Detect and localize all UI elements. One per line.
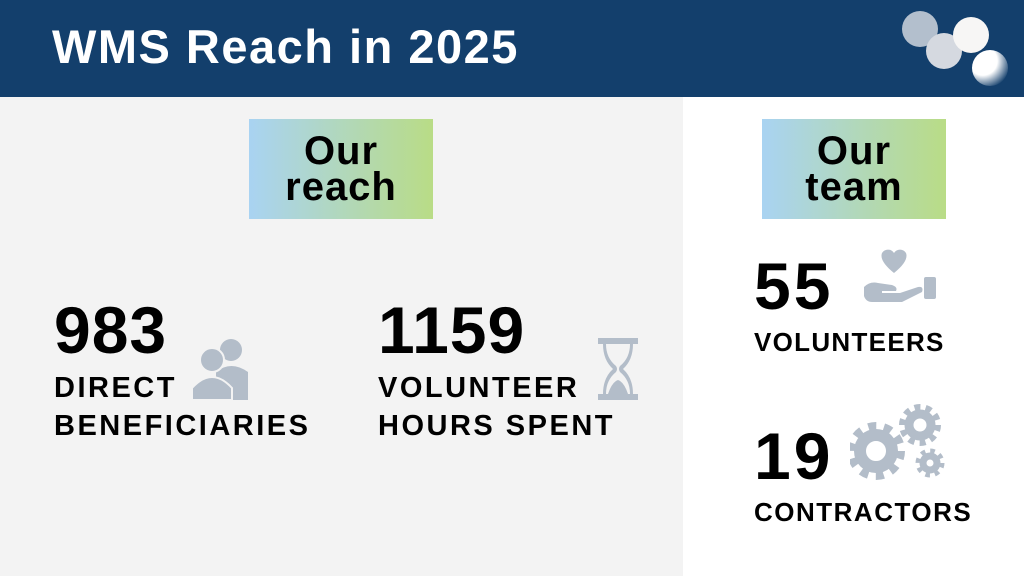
title: WMS Reach in 2025 bbox=[52, 20, 519, 73]
stat: 55 volunteers bbox=[754, 249, 945, 357]
panel: our reach: Our bbox=[304, 129, 378, 173]
stat: 19 contractors bbox=[754, 419, 972, 527]
header bar bbox=[0, 0, 1024, 97]
icon: people bbox=[193, 339, 248, 400]
text: HOURS SPENT bbox=[378, 410, 615, 442]
text: BENEFICIARIES bbox=[54, 410, 310, 442]
panel: our reach bbox=[249, 119, 433, 219]
icon: hourglass bbox=[598, 338, 638, 400]
text: 983 bbox=[54, 293, 167, 367]
text: 1159 bbox=[378, 293, 525, 367]
icon: gears bbox=[850, 404, 944, 480]
icon: heart hand bbox=[864, 250, 936, 302]
left panel background bbox=[0, 97, 683, 576]
text: VOLUNTEER bbox=[378, 372, 579, 404]
panel: our team: team bbox=[805, 165, 903, 209]
text: 55 bbox=[754, 249, 833, 323]
stat: 983 bbox=[54, 293, 310, 442]
panel: our team: Our bbox=[817, 129, 891, 173]
panel: our team bbox=[762, 119, 946, 219]
text: DIRECT bbox=[54, 372, 177, 404]
stat: 1159 bbox=[378, 293, 615, 442]
text: CONTRACTORS bbox=[754, 497, 972, 527]
text: VOLUNTEERS bbox=[754, 327, 945, 357]
panel: our reach: reach bbox=[285, 165, 397, 209]
text: 19 bbox=[754, 419, 833, 493]
decorative circles bbox=[902, 11, 1008, 86]
